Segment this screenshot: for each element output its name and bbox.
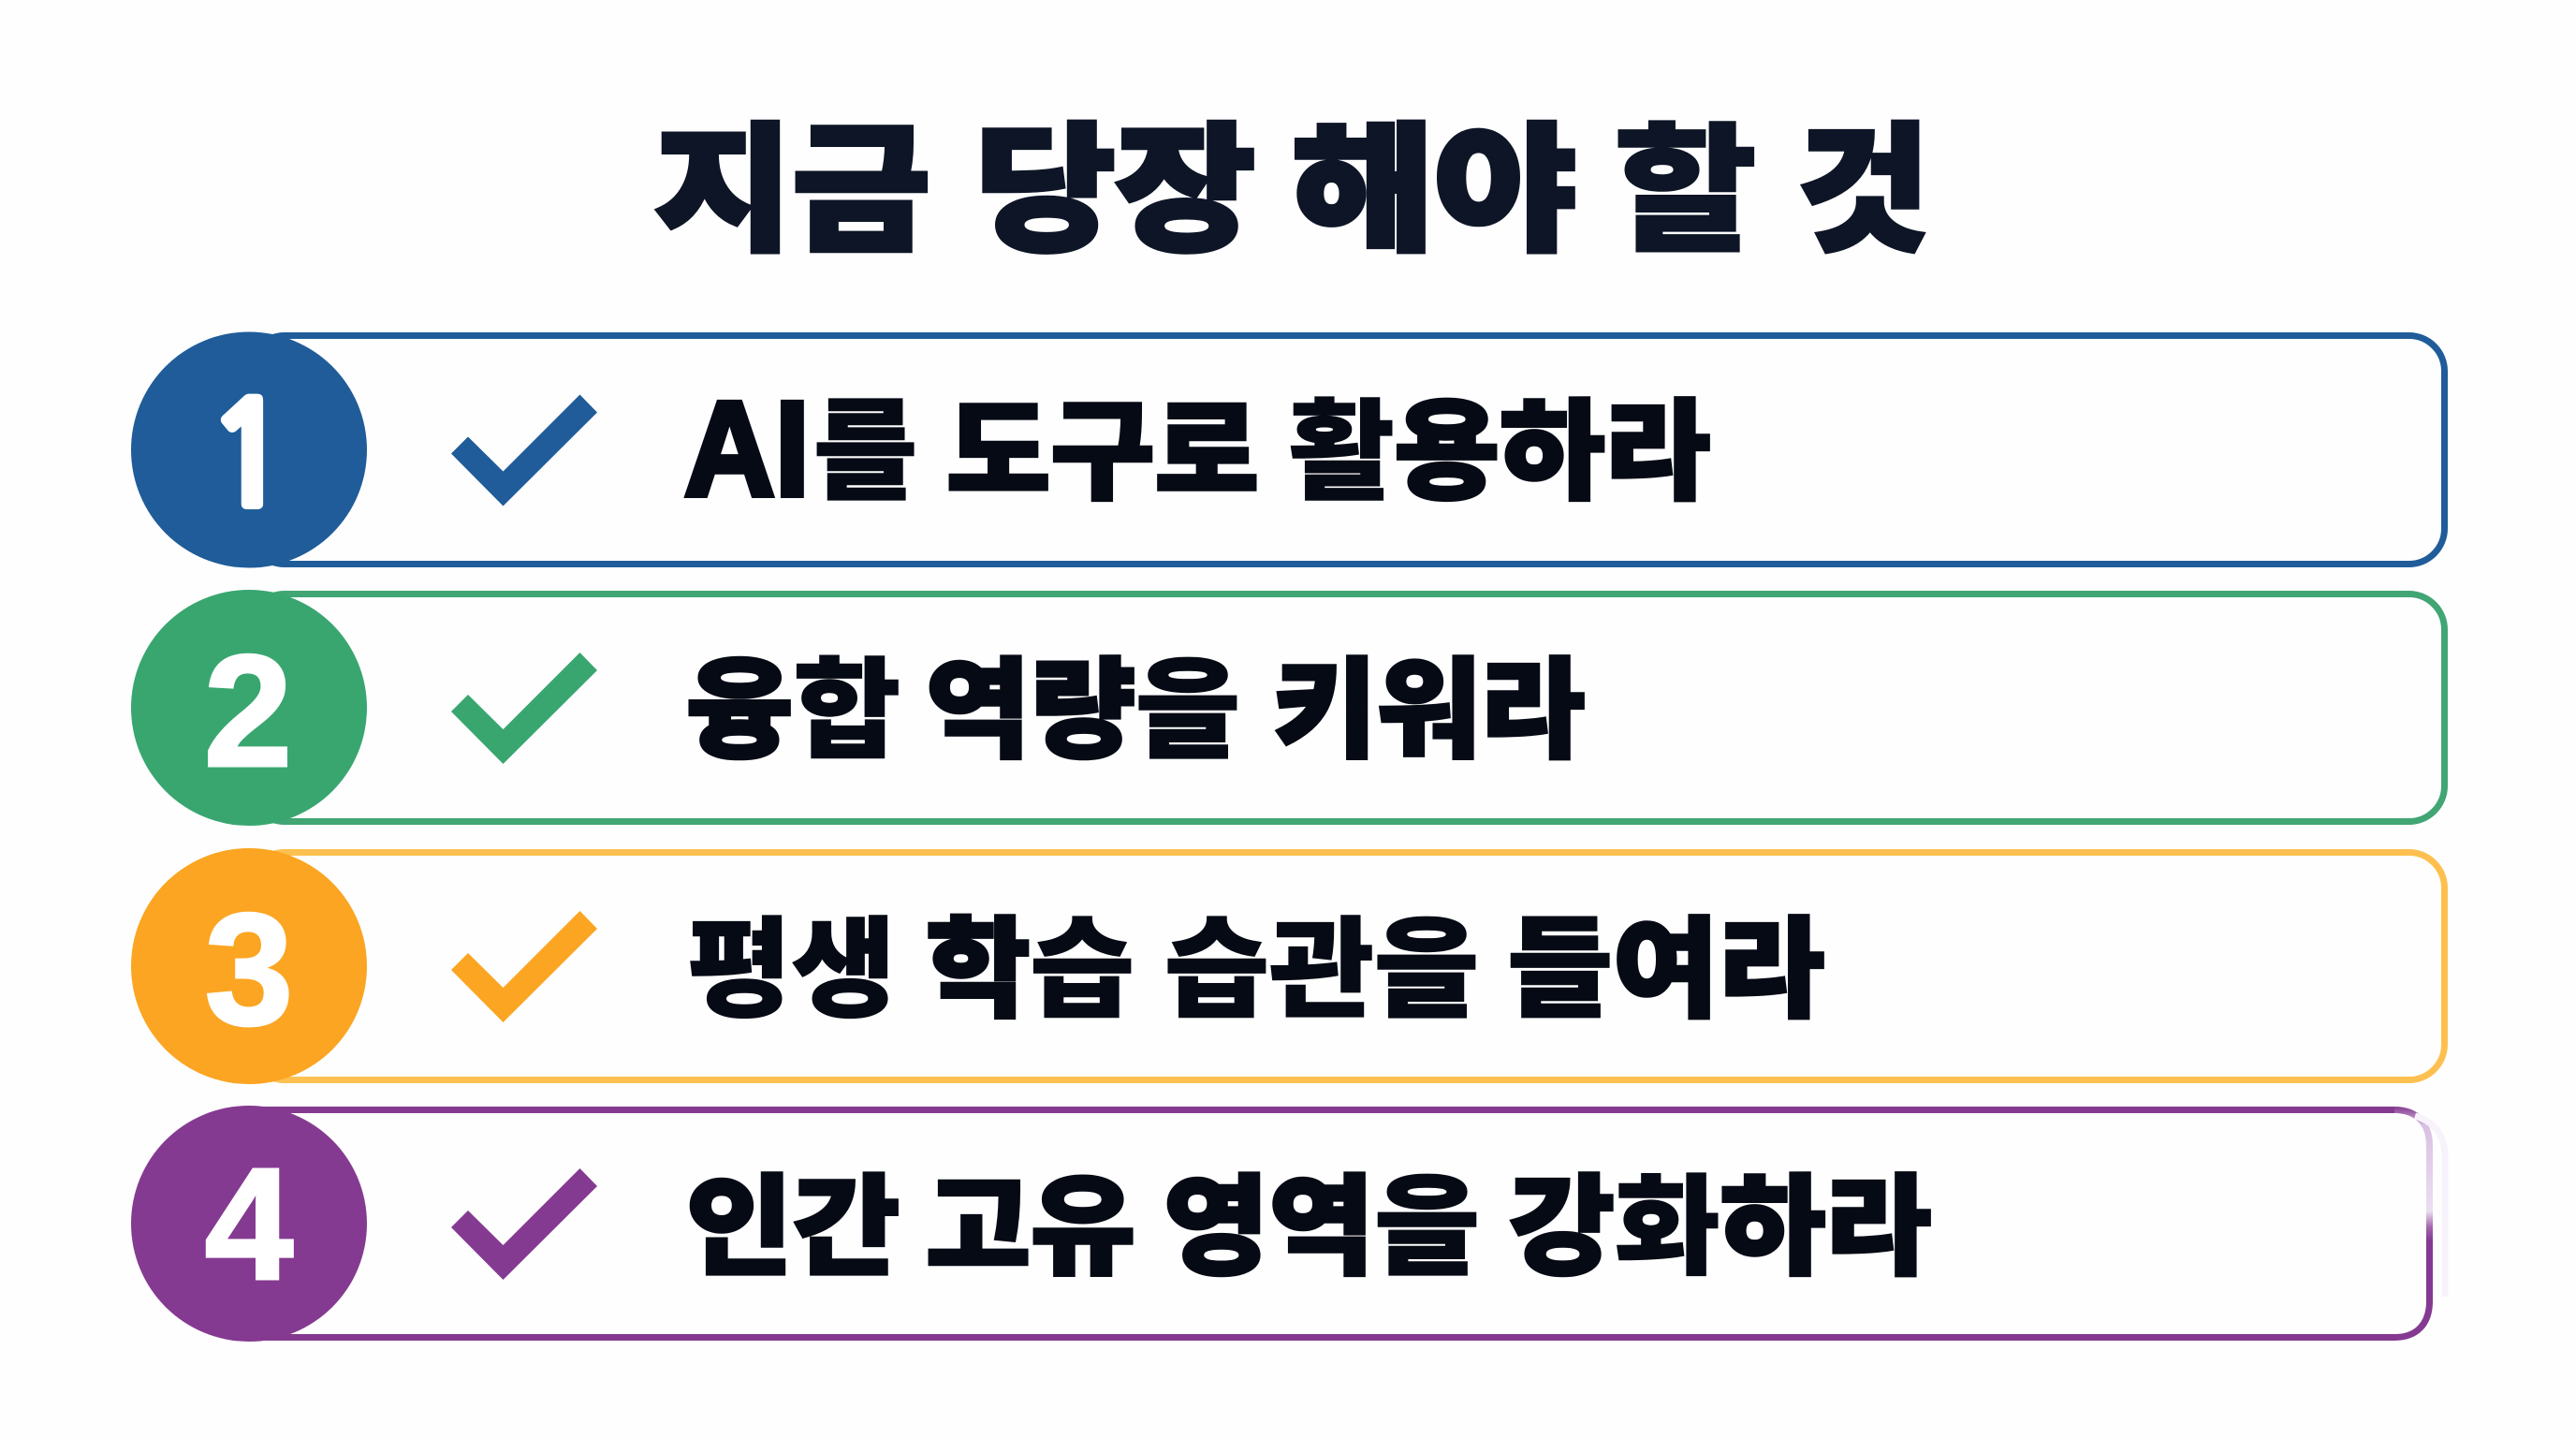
item 2 text xyxy=(686,650,1585,771)
item 1 number badge xyxy=(131,331,367,567)
title: 것 xyxy=(1797,114,1930,269)
item 4 text: 강화하라 xyxy=(1509,1167,1931,1288)
item 2 number badge: 2 xyxy=(204,623,292,800)
panel: item 3 xyxy=(131,848,2445,1084)
item 2 text: 융합 xyxy=(686,650,900,771)
item 3 text: 습관을 xyxy=(1164,909,1479,1031)
item 4 number badge xyxy=(131,1106,367,1342)
title: 할 xyxy=(1614,114,1757,269)
item 1 frame xyxy=(249,335,2445,564)
item 2 number badge xyxy=(131,590,367,826)
item 2 frame xyxy=(249,594,2445,822)
title: 지금 xyxy=(654,114,930,269)
panel: item 1 xyxy=(131,331,2445,567)
item 1 text: 도구로 xyxy=(946,391,1259,513)
item 3 text: 평생 xyxy=(687,909,896,1031)
item 2 text: 키워라 xyxy=(1273,650,1585,771)
item 3 number badge xyxy=(131,848,367,1084)
item 1 number badge: 1 xyxy=(206,385,292,527)
item 4 frame xyxy=(249,1110,2445,1337)
item 1 text xyxy=(684,374,1710,524)
item 1 text: 를 xyxy=(813,391,917,513)
item 4 text: 영역을 xyxy=(1164,1167,1480,1288)
panel: item 2 xyxy=(131,590,2445,826)
item 1 text: 활용하라 xyxy=(1289,391,1710,513)
item 2 text: 역량을 xyxy=(926,650,1240,771)
panel: item 4 xyxy=(131,1106,2445,1342)
item 3 text: 들여라 xyxy=(1507,909,1824,1031)
item 3 text: 학습 xyxy=(926,909,1134,1031)
title: 당장 xyxy=(975,114,1255,269)
item 3 frame xyxy=(249,852,2445,1080)
icon: item 3 check mark xyxy=(451,911,597,1022)
item 4 number badge: 4 xyxy=(205,1136,293,1313)
title: 해야 xyxy=(1292,114,1576,269)
item 1 text: AI xyxy=(684,374,810,524)
item 4 text: 인간 xyxy=(686,1167,900,1288)
title xyxy=(654,114,1930,269)
item 4 text: 고유 xyxy=(926,1167,1135,1288)
item 4 text xyxy=(686,1167,1931,1288)
item 3 text xyxy=(687,909,1824,1031)
icon: item 4 check mark xyxy=(451,1168,597,1280)
icon: item 2 check mark xyxy=(451,653,597,764)
icon: item 1 check mark xyxy=(451,395,597,506)
item 3 number badge: 3 xyxy=(205,881,293,1059)
